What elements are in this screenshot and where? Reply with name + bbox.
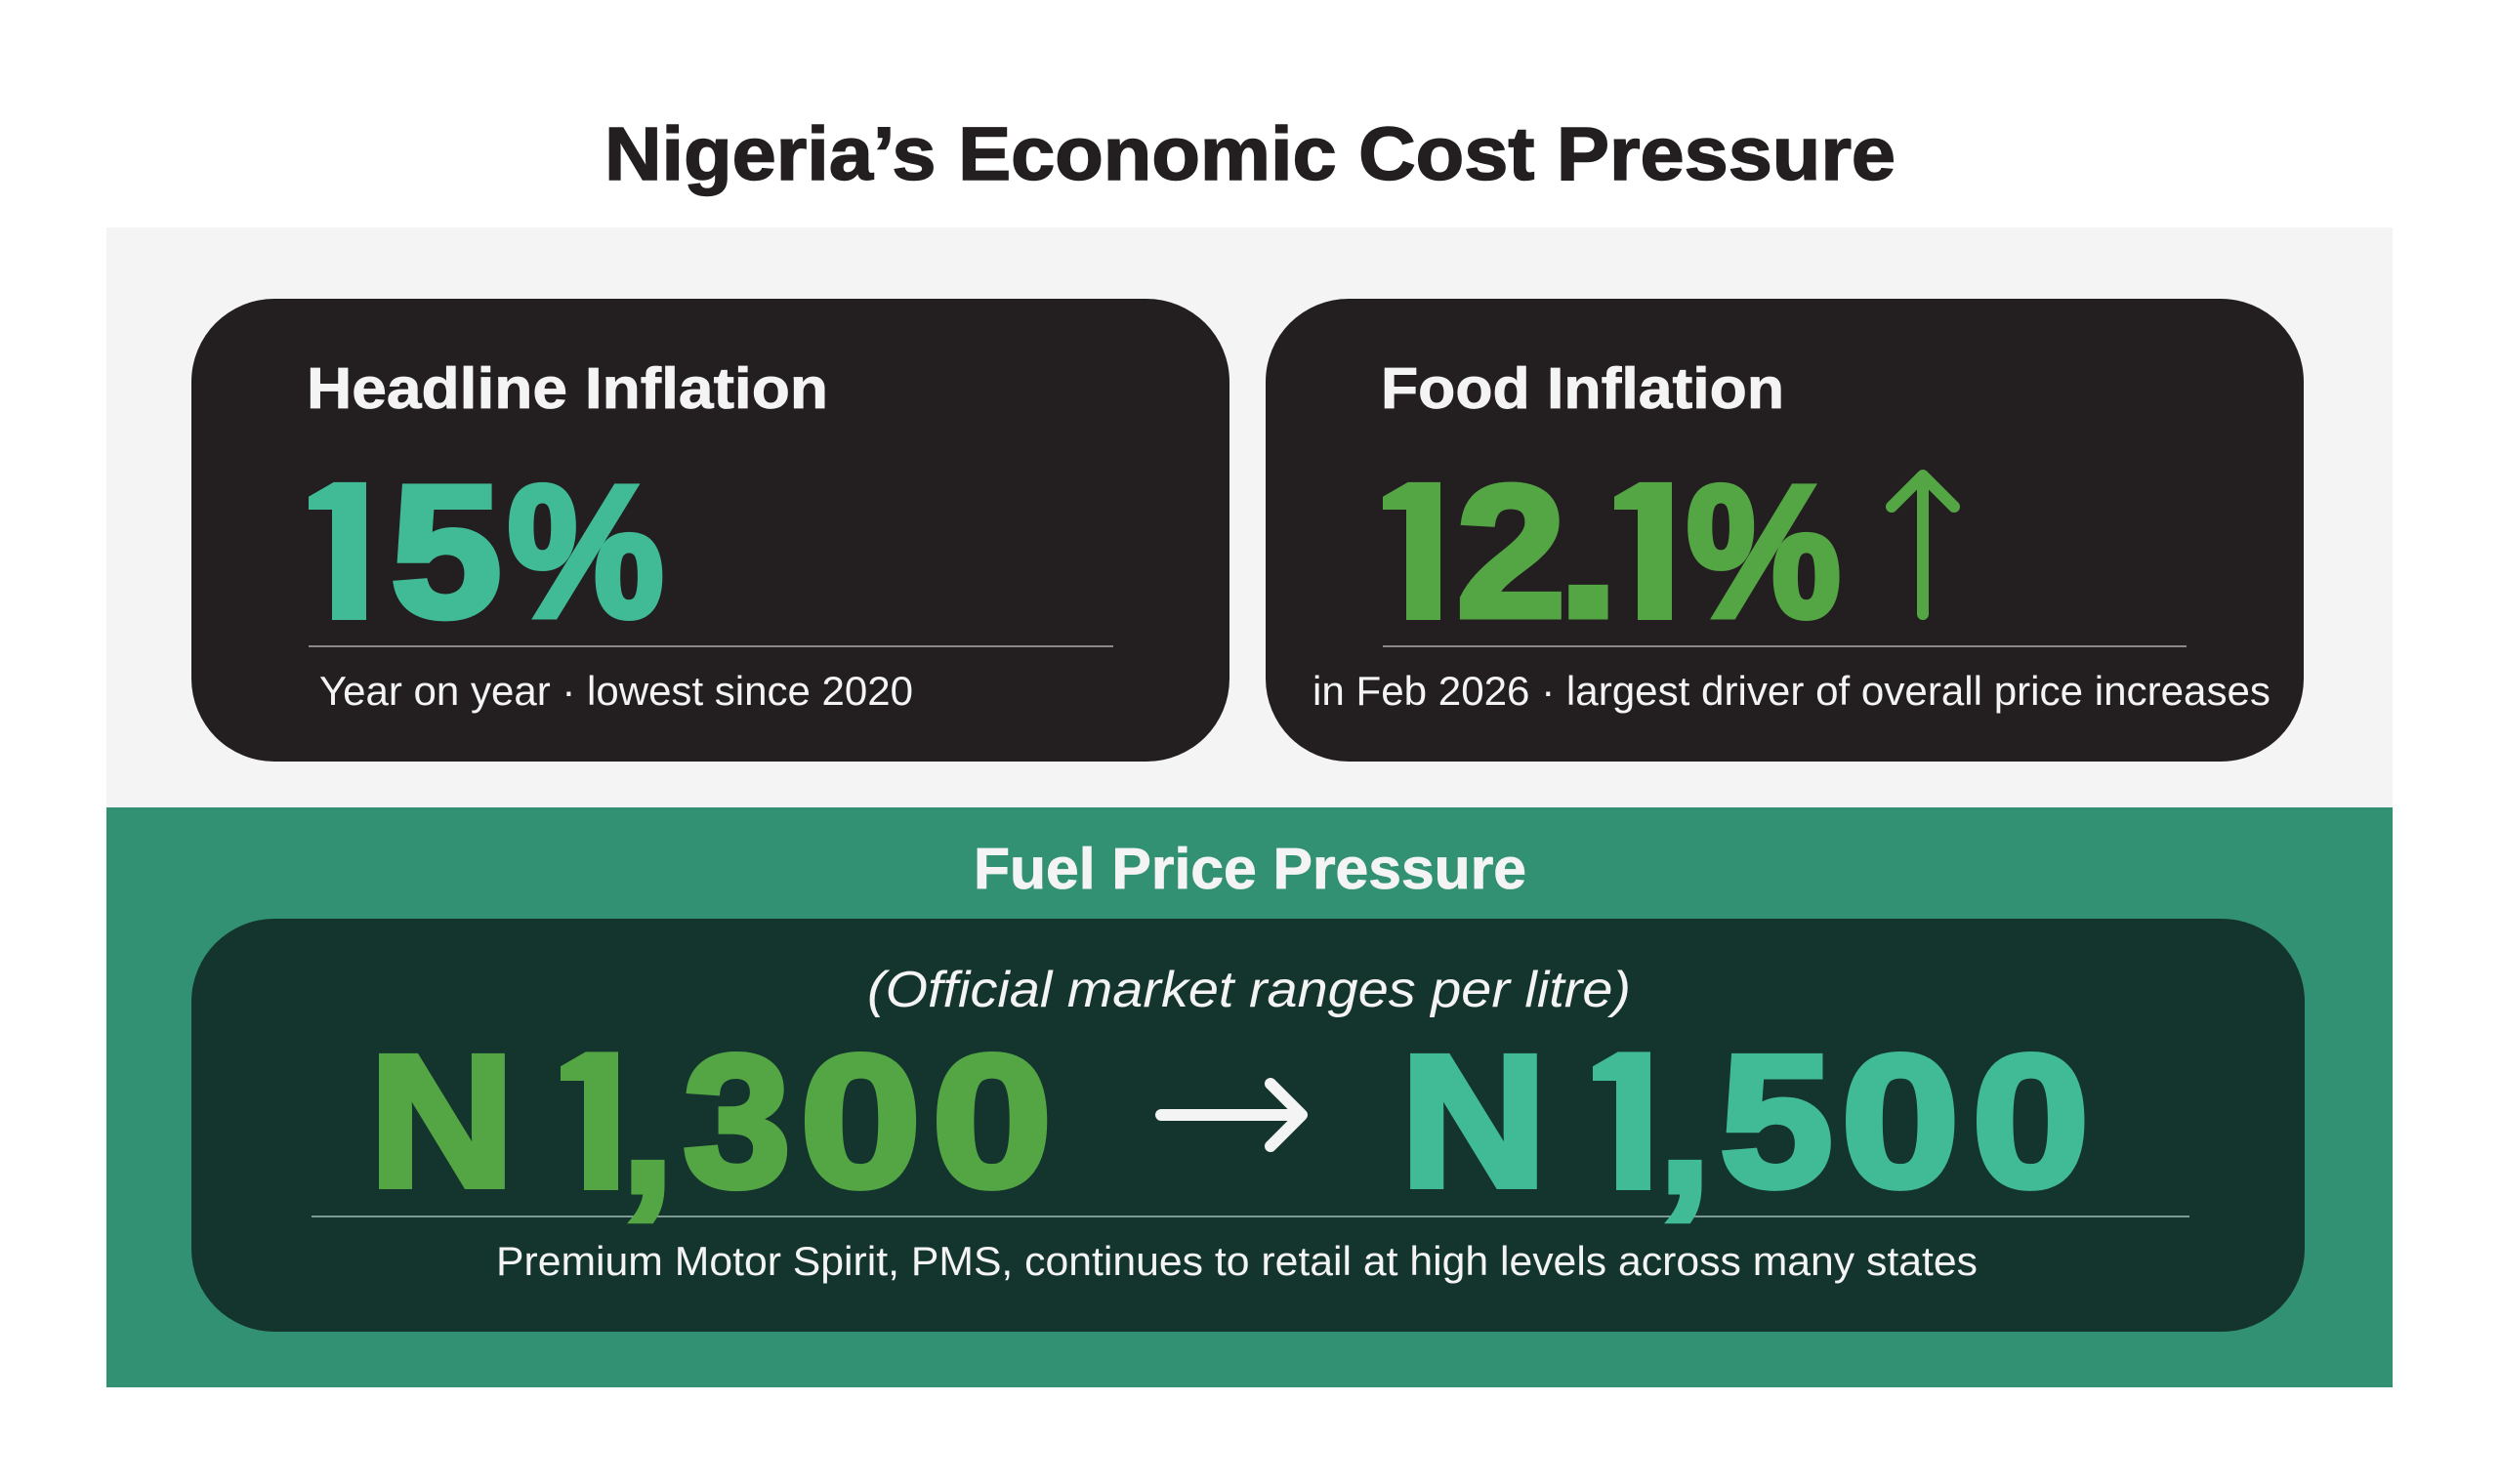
stat: N1,300: N — [369, 1015, 515, 1226]
card: headline inflation — [191, 299, 1229, 762]
stat: 12.1%: 1 — [1591, 446, 1707, 656]
stat: N1,300 — [379, 1051, 1047, 1224]
title: Nigeria’s Economic Cost Pressure — [604, 112, 1896, 196]
heading: headline inflation: Headline Inflation — [307, 356, 828, 421]
stat: 12.1%: % — [1687, 446, 1841, 656]
stat: N1,500: 5 — [1720, 1015, 1833, 1226]
caption: premium motor spirit: Premium Motor Spirit, PMS, continues to retail at high levels across many states — [496, 1238, 1978, 1284]
stat: 12.1% — [1383, 482, 1840, 621]
stat: N1,300: 0 — [800, 1015, 921, 1226]
stat: 15%: 1 — [285, 446, 401, 656]
stat: N1,500 — [1410, 1051, 2084, 1224]
heading: fuel price pressure: Fuel Price Pressure — [974, 837, 1526, 901]
arrow: price rise — [1161, 1084, 1302, 1146]
stat: N1,300: 0 — [932, 1015, 1052, 1226]
stat: 15% — [309, 482, 662, 621]
stat: N1,300: , — [621, 1021, 674, 1231]
caption: headline inflation: Year on year · lowest since 2020 — [319, 668, 913, 714]
stat: 12.1%: 1 — [1359, 446, 1476, 656]
stat: N1,300: 1 — [537, 1015, 653, 1226]
stat: 12.1%: . — [1558, 446, 1619, 656]
stat: N1,300: 3 — [684, 1015, 791, 1226]
heading: food inflation: Food Inflation — [1381, 356, 1784, 421]
stat: N1,500: 1 — [1569, 1015, 1686, 1226]
panel: fuel price section — [106, 807, 2393, 1387]
stat: 15%: % — [508, 446, 664, 656]
stat: N1,500: 0 — [1972, 1015, 2089, 1226]
card: food inflation — [1266, 299, 2304, 762]
card: fuel prices — [191, 919, 2305, 1332]
stat: N1,500: , — [1658, 1021, 1711, 1231]
stat: 15%: 5 — [391, 446, 502, 656]
stat: 12.1%: 2 — [1457, 446, 1565, 656]
icon: up arrow — [1892, 475, 1954, 614]
caption: food inflation: in Feb 2026 · largest driver of overall price increases — [1312, 668, 2271, 714]
panel: inflation section background — [106, 227, 2393, 807]
infographic canvas — [106, 124, 2393, 1387]
stat: N1,500: 0 — [1841, 1015, 1959, 1226]
stat: N1,500: N — [1400, 1015, 1547, 1226]
subheading: official market ranges: (Official market ranges per litre) — [867, 962, 1631, 1018]
